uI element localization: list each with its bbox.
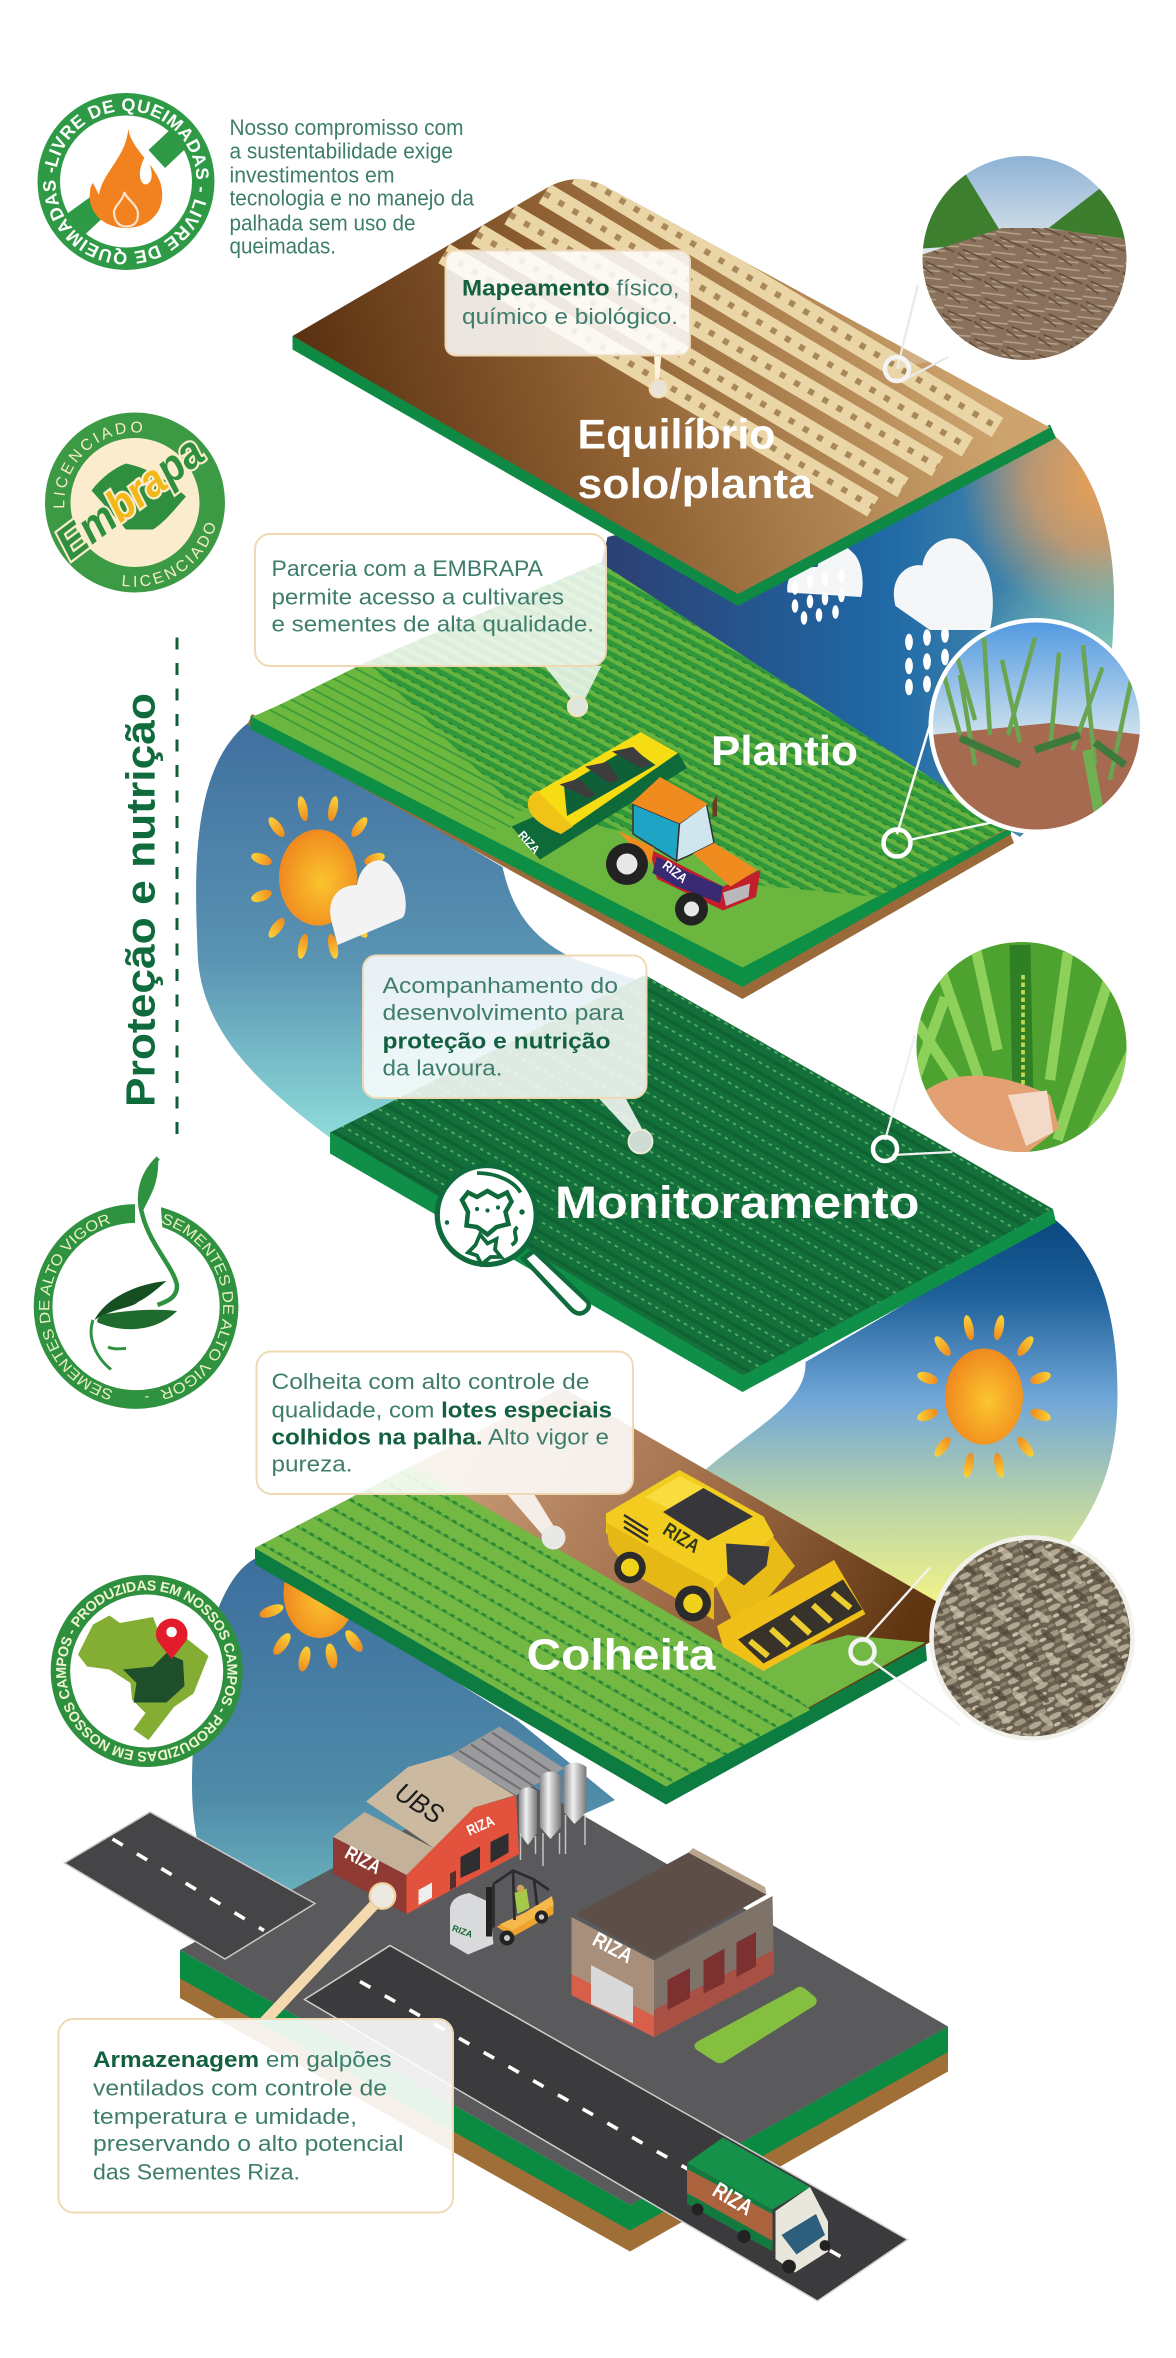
- RIZA truck sign: RIZA: [708, 2177, 757, 2220]
- callout: Armazenagem: ventilados com controle de: [93, 2076, 387, 2101]
- illustration: truck: [687, 2138, 830, 2273]
- wheat rows: [444, 174, 998, 507]
- heading: Plantio: Plantio: [711, 727, 858, 774]
- badge: Embrapa licenciado: LICENCIADO: [53, 422, 142, 508]
- RIZA sign: RIZA: [589, 1928, 637, 1968]
- panel: Equilíbrio solo/planta plate: [292, 174, 1056, 606]
- badge: Embrapa licenciado: Embrapa: [46, 425, 213, 569]
- heading: Colheita: Colheita: [526, 1632, 716, 1680]
- illustration: tractor with seeder: RIZA: [515, 828, 543, 857]
- doors: [418, 1833, 508, 1905]
- side label: Proteção e nutrição: Proteção e nutrição: [117, 693, 164, 1107]
- heading: Equilíbrio solo/planta: [578, 411, 814, 507]
- callout: Parceria EMBRAPA: [255, 534, 606, 716]
- ribbon: weather band, Plantio to Monitoramento: [196, 720, 645, 1140]
- intro text block: queimadas.: [230, 234, 336, 259]
- badge: Livre de queimadas: LIVRE DE QUEIMADAS - LIVRE DE QUEIMADAS -: [43, 98, 209, 264]
- badge: Sementes de alto vigor: -: [145, 1396, 149, 1398]
- illustration: tractor with seeder: RIZA: [660, 858, 690, 886]
- panel: Plantio plate: [248, 562, 1014, 999]
- illustration: combine harvester: [606, 1470, 866, 1671]
- lighter rows at left: [267, 662, 518, 830]
- intro text block: a sustentabilidade exige: [230, 138, 453, 163]
- UBS sign: UBS: [390, 1777, 449, 1830]
- badge: Embrapa licenciado: LICENCIADO: [122, 522, 215, 587]
- callout: Acompanhamento: desenvolvimento para: [382, 1000, 625, 1025]
- ribbon: weather band, Equilíbrio to Plantio: [600, 432, 1114, 837]
- badge: Sementes de alto vigor: SEMENTES DE ALTO VIGOR: [160, 1214, 234, 1399]
- callout: Acompanhamento: [363, 956, 652, 1154]
- intro text block: [230, 115, 474, 259]
- callout: Acompanhamento: da lavoura.: [382, 1056, 502, 1081]
- callout: Acompanhamento: proteção e nutrição: [382, 1029, 610, 1054]
- road: left side: [64, 1812, 315, 1959]
- callout: Armazenagem: Armazenagem em galpões: [93, 2047, 392, 2072]
- RIZA wall sign front: RIZA: [464, 1812, 497, 1840]
- photo: straw ground with connector: [885, 156, 1134, 381]
- callout: Mapeamento: Mapeamento físico,: [462, 276, 680, 301]
- badge: Sementes de alto vigor: [34, 1156, 238, 1409]
- callout: Mapeamento: químico e biológico.: [462, 304, 678, 329]
- panel: Colheita plate: [255, 1388, 938, 1804]
- illustration: combine harvester: RIZA: [659, 1519, 704, 1558]
- ribbon: weather band, Colheita to Armazenagem: [192, 1557, 615, 1942]
- photo: panicle in hand with connector: [873, 942, 1132, 1170]
- illustration: forklift and seed bag: [450, 1870, 554, 1954]
- building: Riza office: [572, 1848, 774, 2037]
- callout: Armazenagem: preservando o alto potencial: [93, 2131, 404, 2156]
- heading: Monitoramento: Monitoramento: [555, 1177, 920, 1228]
- callout: Armazenagem: temperatura e umidade,: [93, 2104, 357, 2129]
- road: main: [304, 1946, 908, 2301]
- crop rows: [368, 562, 1008, 897]
- ribbon: weather band, Monitoramento to Colheita: [705, 1218, 1118, 1628]
- callout: Colheita: colhidos na palha. Alto vigor e: [272, 1425, 609, 1450]
- panel: Armazenagem yard plate: [64, 1773, 948, 2301]
- side dashed line: [176, 638, 178, 1140]
- icon: sun right: [916, 1314, 1052, 1479]
- callout: Armazenagem: das Sementes Riza.: [93, 2160, 300, 2185]
- badge: Produzidas em nossos campos: PRODUZIDAS EM NOSSOS CAMPOS - PRODUZIDAS EM NOSSOS CAMPOS -: [56, 1580, 238, 1762]
- tractor cab: [633, 804, 680, 861]
- crop rows: [255, 1466, 810, 1786]
- icon: rain clouds: [787, 538, 993, 695]
- illustration: tractor with seeder: [512, 732, 760, 926]
- badge: Sementes de alto vigor: SEMENTES DE ALTO VIGOR: [38, 1214, 112, 1400]
- callout: Parceria EMBRAPA: e sementes de alta qualidade.: [272, 612, 594, 637]
- heading: Equilíbrio solo/planta: Equilíbrio: [578, 411, 776, 458]
- building: UBS warehouse: [333, 1726, 586, 1914]
- green parking pad: [694, 1987, 817, 2063]
- silos: [519, 1762, 586, 1866]
- illustration: forklift and seed bag: RIZA: [451, 1923, 474, 1940]
- icon: magnifier with microbes: [437, 1166, 589, 1314]
- callout: Colheita: Colheita com alto controle de: [272, 1369, 590, 1394]
- RIZA wall sign side: RIZA: [341, 1842, 385, 1879]
- panel: Monitoramento plate: [330, 975, 1056, 1392]
- callout: Colheita: pureza.: [272, 1452, 352, 1477]
- heading: Equilíbrio solo/planta: solo/planta: [578, 460, 814, 507]
- metal roof: [450, 1726, 564, 1796]
- photo: young plants with connector: [884, 618, 1143, 856]
- callout: Colheita: qualidade, com lotes especiais: [272, 1398, 612, 1423]
- callout: Parceria EMBRAPA: permite acesso a cultivares: [272, 585, 564, 610]
- intro text block: palhada sem uso de: [230, 210, 416, 235]
- icon: sun lower left: [258, 1548, 366, 1673]
- map pin: [156, 1619, 188, 1659]
- tractor body: [650, 849, 760, 910]
- map of Brazil: [78, 1616, 208, 1740]
- callout: Armazenagem: [58, 1883, 453, 2212]
- intro text block: tecnologia e no manejo da: [230, 186, 474, 211]
- photo: seeds with connector: [850, 1538, 1132, 1738]
- icon: sun and cloud: [250, 795, 406, 960]
- callout: Mapeamento: [446, 250, 690, 398]
- callout: Parceria EMBRAPA: Parceria com a EMBRAPA: [272, 556, 543, 581]
- intro text block: investimentos em: [230, 162, 394, 187]
- callout: Colheita: [256, 1352, 633, 1550]
- intro text block: Nosso compromisso com: [230, 115, 464, 140]
- callout: Acompanhamento: Acompanhamento do: [382, 973, 618, 998]
